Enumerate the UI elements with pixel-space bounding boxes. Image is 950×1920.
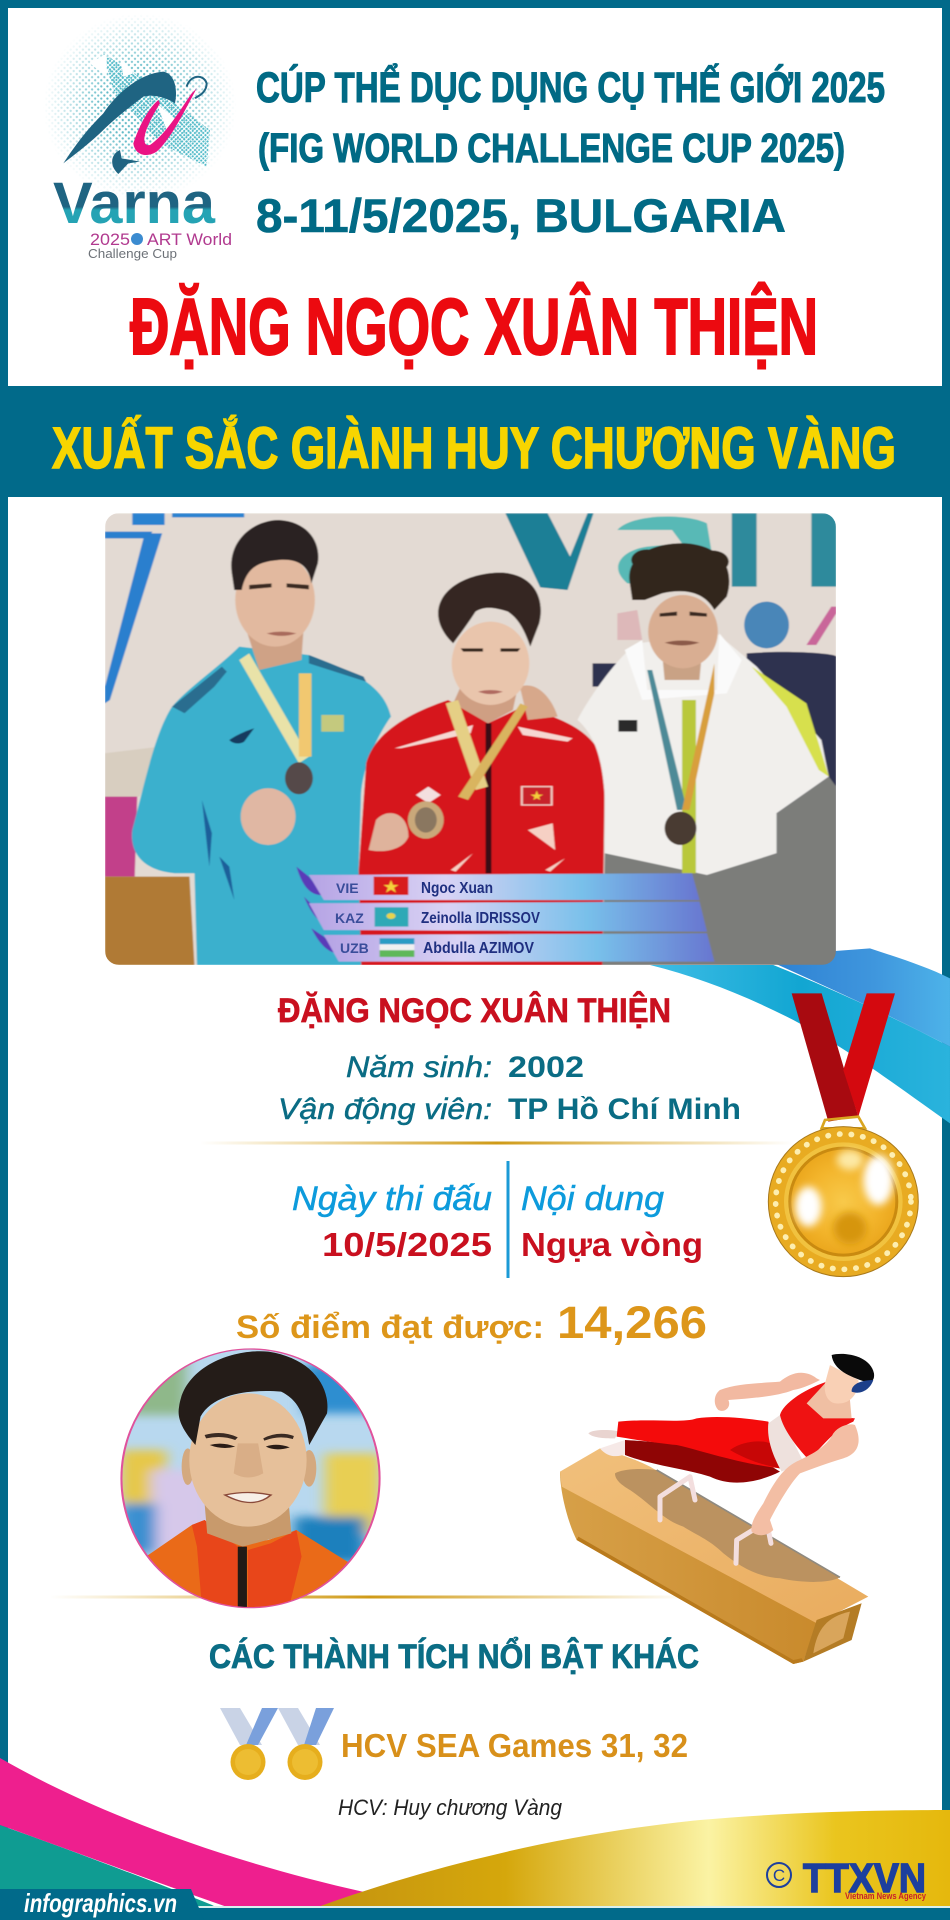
result bar labels: Ngoc Xuan (421, 880, 493, 897)
logo: Varna 2025: Varna (53, 171, 216, 236)
logo: Varna 2025: 2025 (90, 230, 130, 249)
logo: Varna 2025: ART World (147, 230, 232, 249)
logo: Varna 2025 (40, 10, 240, 261)
illustration: gymnast on pommel horse (560, 1354, 874, 1664)
result bar labels: KAZ (335, 910, 364, 926)
birth year row: 2002 (508, 1051, 584, 1084)
result bar labels: VIE (336, 880, 359, 896)
icon: gold medal (768, 993, 918, 1277)
pommel horse (560, 1448, 868, 1664)
score: Số điểm đạt được: (236, 1309, 544, 1345)
gymnast (588, 1354, 874, 1535)
birth year row: Năm sinh: (346, 1051, 492, 1084)
centre athlete (359, 700, 605, 965)
gold divider two (50, 1596, 690, 1598)
competition event: Ngựa vòng (521, 1226, 703, 1263)
header panel (8, 8, 942, 386)
competition date (292, 1180, 492, 1263)
competition date: Ngày thi đấu (292, 1180, 492, 1218)
teal banner (0, 386, 950, 497)
left athlete (132, 647, 391, 965)
athlete home city row: TP Hồ Chí Minh (508, 1093, 741, 1126)
achievements heading: CÁC THÀNH TÍCH NỔI BẬT KHÁC (209, 1638, 699, 1676)
result bars (296, 866, 334, 953)
footnote: HCV: Huy chương Vàng (338, 1795, 563, 1820)
logo: TTXVN: C (773, 1866, 785, 1885)
result bar labels: UZB (340, 940, 369, 956)
competition event (521, 1180, 703, 1263)
logo: Varna 2025: Challenge Cup (88, 246, 177, 261)
athlete portrait (120, 1348, 381, 1608)
podium photo (105, 513, 836, 965)
competition date: 10/5/2025 (322, 1226, 492, 1263)
right athlete (578, 633, 829, 877)
content panel (8, 497, 942, 1920)
website label: infographics.vn (24, 1888, 177, 1918)
result bar labels: Abdulla AZIMOV (423, 940, 534, 957)
logo: TTXVN: Vietnam News Agency (845, 1891, 926, 1901)
event date and place: 8-11/5/2025, BULGARIA (256, 189, 786, 242)
result bar labels (335, 880, 540, 957)
birth year row (346, 1051, 584, 1084)
achievement text: HCV SEA Games 31, 32 (341, 1727, 688, 1764)
athlete home city row: Vận động viên: (278, 1093, 492, 1126)
logo: TTXVN: TTXVN (803, 1855, 926, 1901)
footer decoration (0, 1758, 950, 1920)
icon: two gold medals (220, 1708, 334, 1780)
blue swoosh ribbon (650, 948, 950, 1123)
competition event: Nội dung (521, 1180, 664, 1218)
athlete home city row (278, 1093, 741, 1126)
athlete sub-heading: ĐẶNG NGỌC XUÂN THIỆN (278, 992, 671, 1030)
score (236, 1297, 707, 1348)
result bar labels: Zeinolla IDRISSOV (421, 910, 540, 927)
score: 14,266 (557, 1297, 707, 1348)
